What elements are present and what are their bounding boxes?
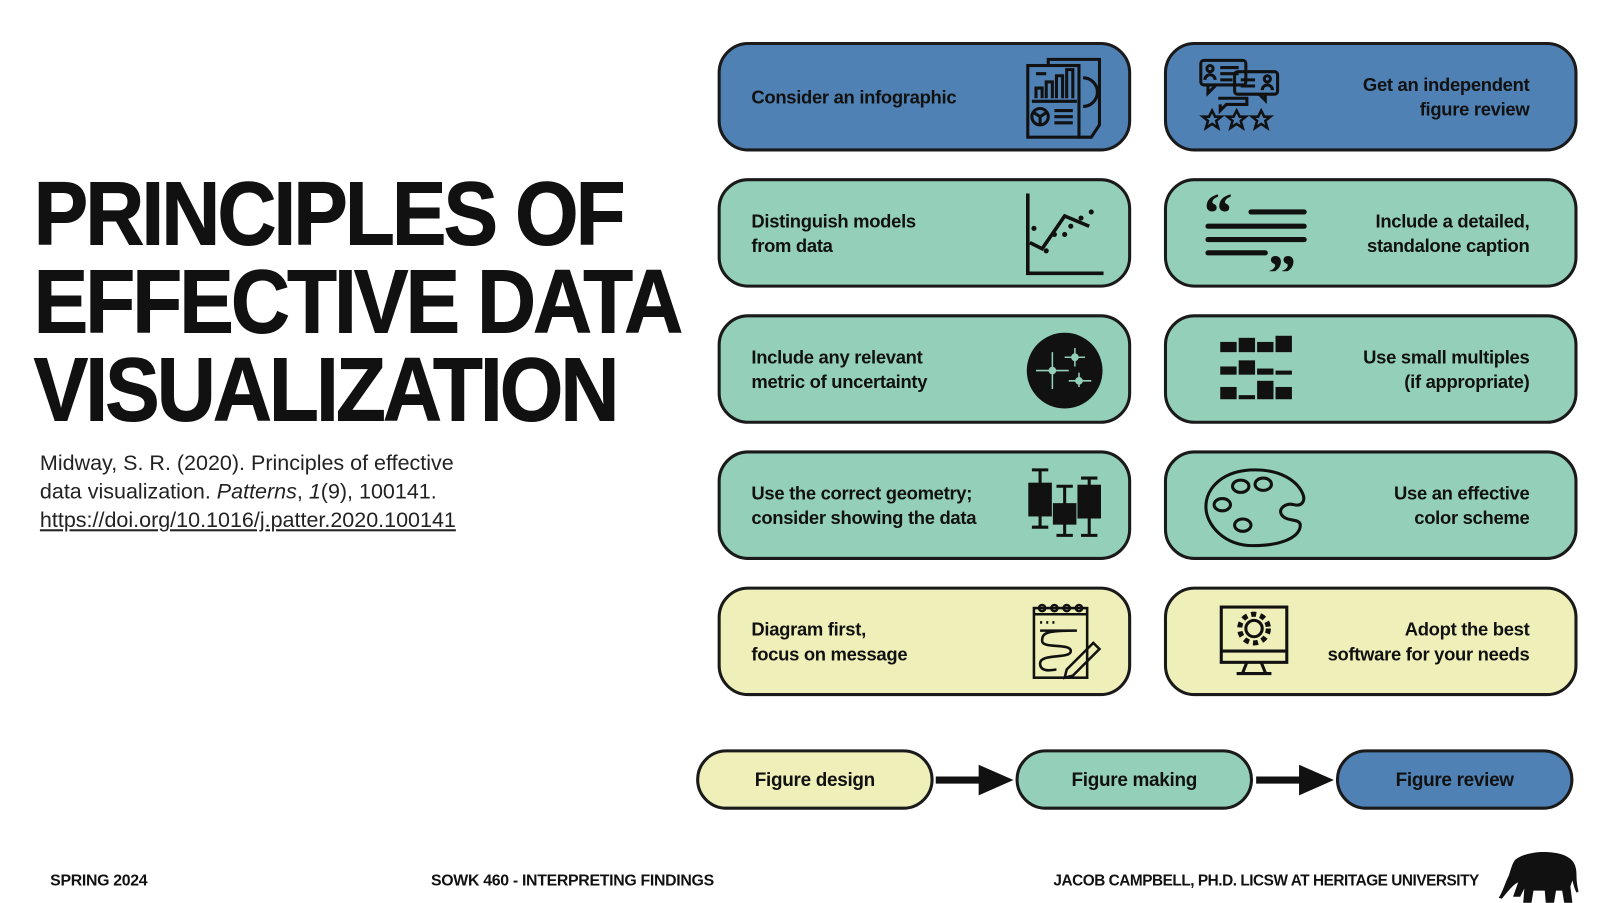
box: diagram first: Diagram first,: [751, 619, 866, 639]
box: small multiples: Use small multiples: [1363, 347, 1529, 367]
box: geometry: Use the correct geometry;: [751, 483, 972, 503]
arrow: making to review: [1256, 764, 1334, 796]
box: small multiples: [1164, 314, 1578, 424]
icon: box plots: [1028, 468, 1101, 537]
pill: figure review: [1336, 749, 1573, 810]
icon: infographic: [1026, 58, 1101, 139]
box: color scheme: [1164, 450, 1578, 560]
box: software: [1164, 587, 1578, 696]
pill: figure making: [1016, 749, 1253, 810]
box: distinguish models: Distinguish models: [751, 210, 916, 231]
title: PRINCIPLES OF: [34, 163, 623, 264]
box: software: Adopt the best: [1405, 619, 1529, 639]
box: uncertainty: metric of uncertainty: [751, 371, 927, 392]
citation: Midway, S. R. (2020). Principles of effective: [40, 451, 454, 475]
footer: author: JACOB CAMPBELL, PH.D. LICSW AT HERITAGE UNIVERSITY: [1053, 872, 1479, 890]
box: caption: [1164, 178, 1578, 288]
box: geometry: [718, 450, 1131, 560]
box: color scheme: Use an effective: [1394, 483, 1529, 503]
footer: term: SPRING 2024: [50, 872, 147, 890]
icon: error bars circle: [1026, 332, 1102, 408]
pill: figure making: Figure making: [1072, 768, 1197, 790]
icon: quote lines: [1204, 191, 1307, 272]
box: independent figure review: figure review: [1420, 99, 1529, 119]
box: small multiples: (if appropriate): [1404, 371, 1529, 392]
box: consider an infographic: Consider an infographic: [751, 87, 956, 107]
title: VISUALIZATION: [34, 339, 617, 440]
pill: figure design: [696, 749, 934, 810]
arrow: design to making: [936, 764, 1014, 796]
icon: notepad pencil: [1032, 604, 1102, 680]
citation: https://doi.org/10.1016/j.patter.2020.100141: [40, 509, 456, 532]
box: caption: Include a detailed,: [1376, 210, 1529, 231]
box: diagram first: focus on message: [751, 643, 907, 664]
icon: elephant: [1498, 852, 1578, 903]
icon: line chart: [1026, 194, 1104, 276]
title: EFFECTIVE DATA: [34, 251, 680, 352]
box: distinguish models: from data: [751, 235, 833, 255]
box: independent figure review: Get an independent: [1363, 74, 1529, 95]
box: distinguish models: [718, 178, 1131, 288]
box: diagram first: [718, 587, 1131, 696]
icon: monitor gear: [1220, 606, 1288, 676]
box: software: software for your needs: [1328, 643, 1529, 664]
pill: figure design: Figure design: [755, 768, 875, 790]
box: consider an infographic: [718, 42, 1131, 152]
icon: review: [1199, 58, 1280, 131]
box: uncertainty: [718, 314, 1131, 424]
box: independent figure review: [1164, 42, 1578, 152]
icon: small multiples: [1220, 336, 1292, 400]
citation: data visualization. Patterns, 1(9), 100141.: [40, 480, 437, 504]
footer: course: SOWK 460 - INTERPRETING FINDINGS: [431, 872, 714, 890]
title: [34, 163, 682, 440]
icon: palette: [1204, 468, 1306, 548]
box: caption: standalone caption: [1367, 235, 1529, 255]
citation: [40, 451, 456, 532]
box: geometry: consider showing the data: [751, 507, 976, 528]
box: uncertainty: Include any relevant: [751, 347, 922, 367]
box: color scheme: color scheme: [1414, 507, 1529, 528]
pill: figure review: Figure review: [1396, 768, 1514, 790]
